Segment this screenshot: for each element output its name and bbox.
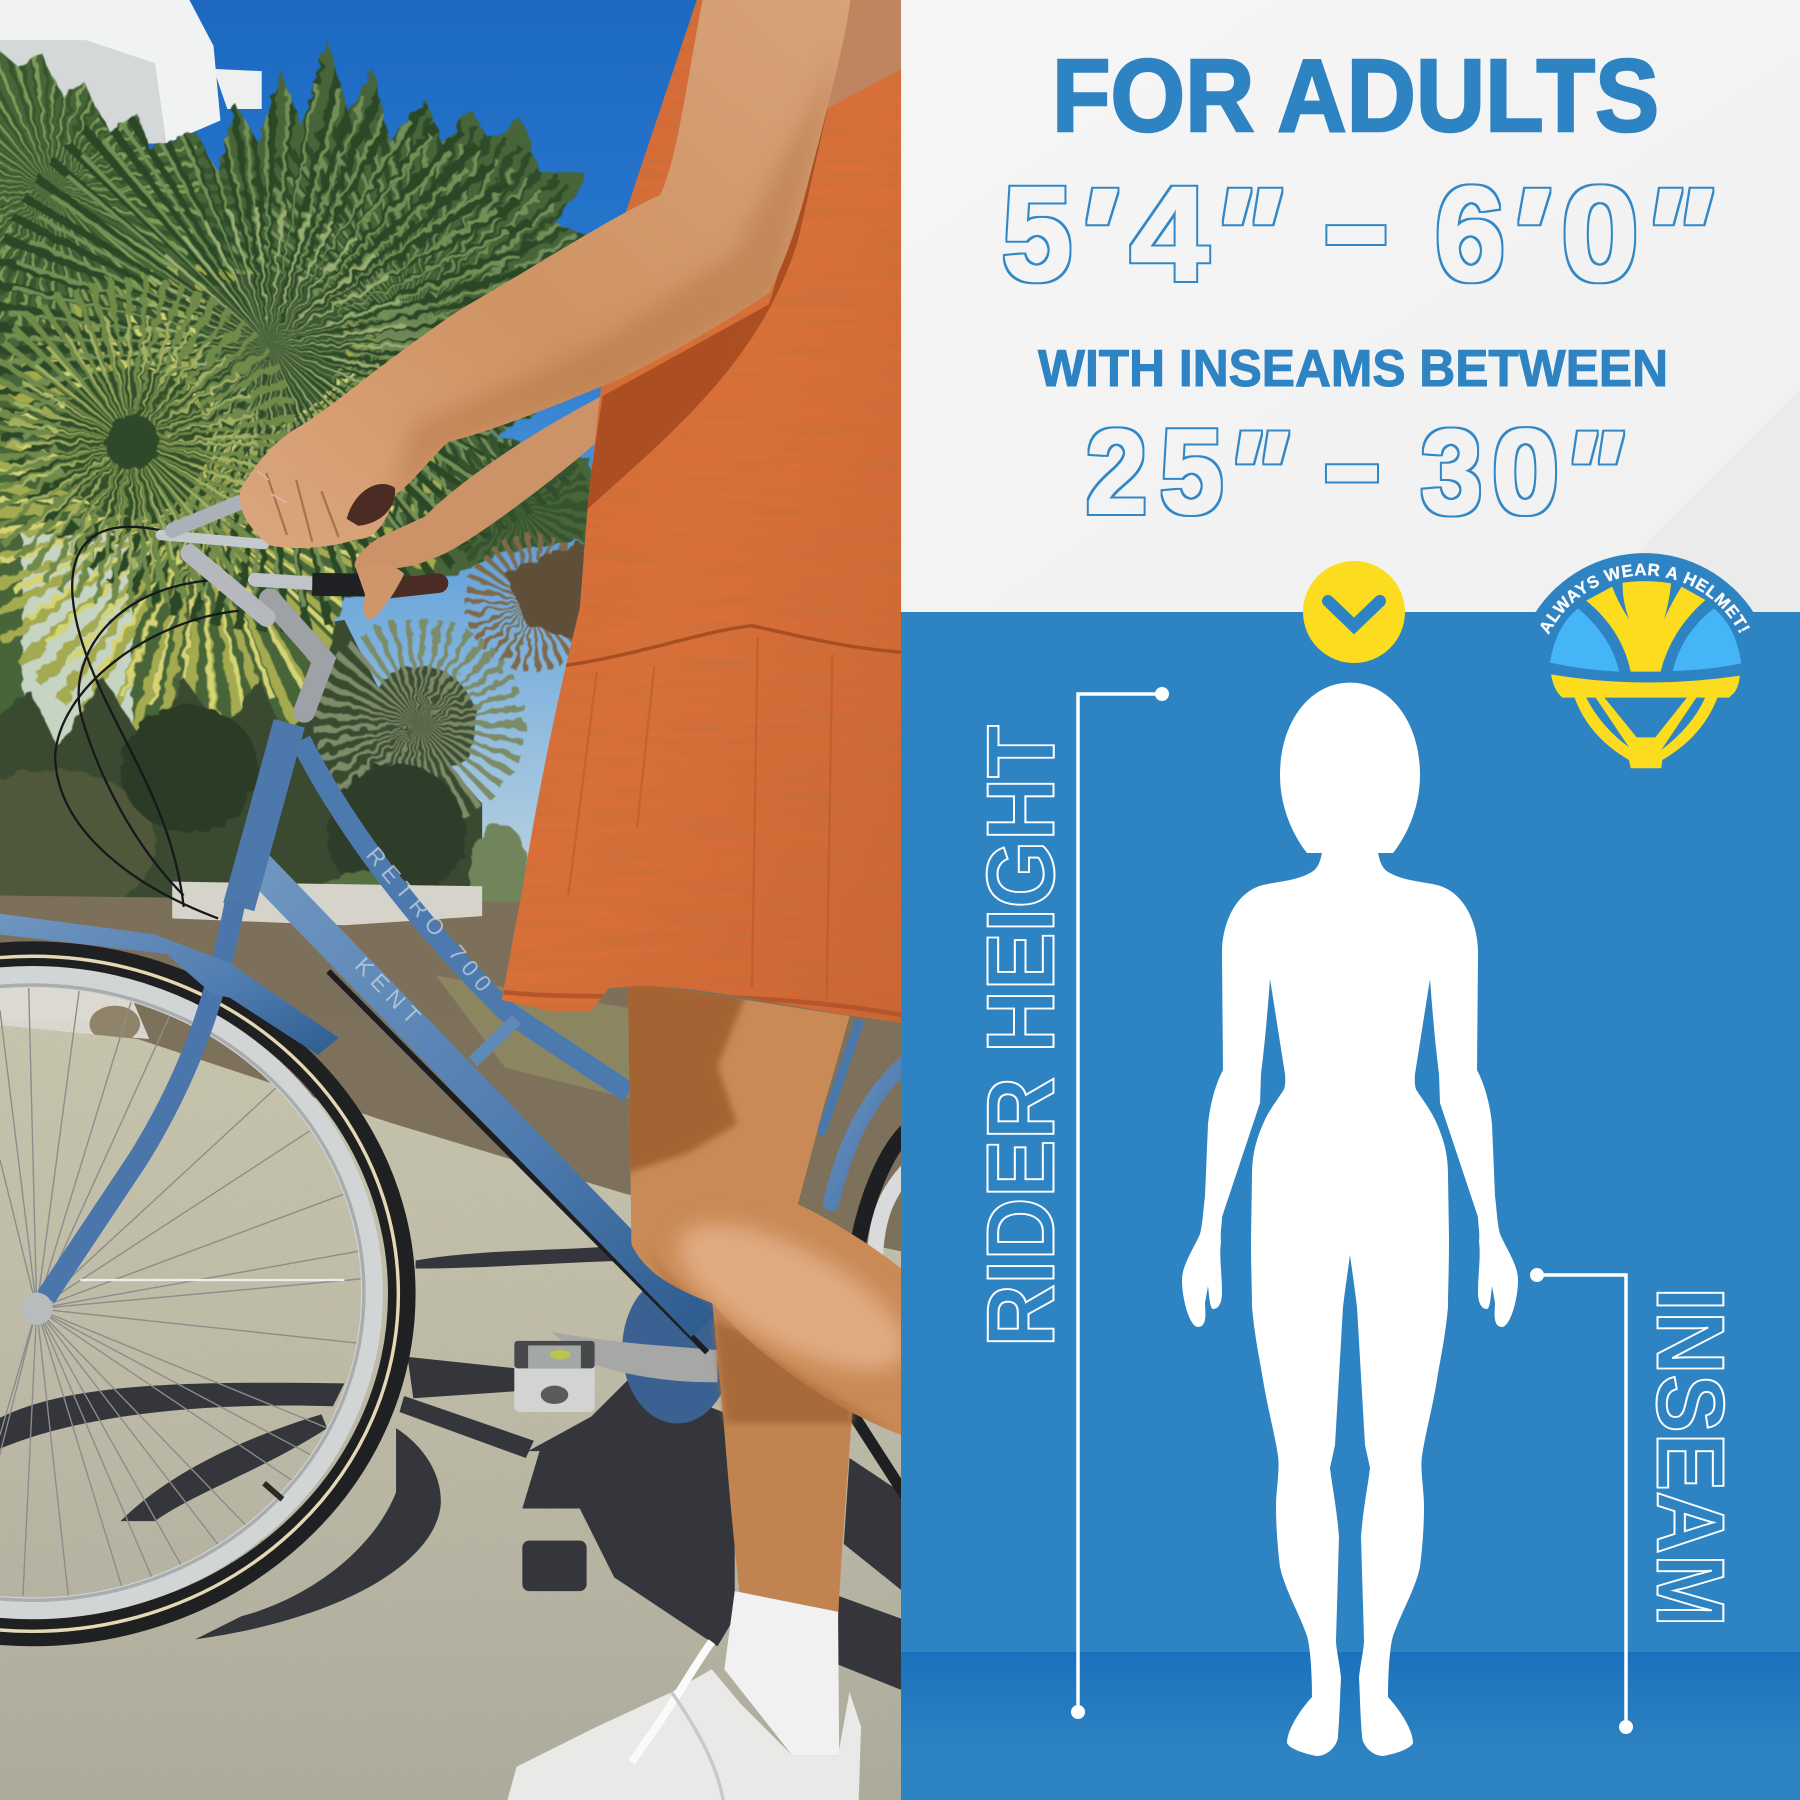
panel: light heading area <box>901 0 1800 613</box>
top left palm <box>0 98 143 281</box>
outlined rider height range: 0 <box>1561 160 1639 309</box>
inseam label: INSEAM <box>1636 1287 1744 1627</box>
subheading: with inseams between: WITH INSEAMS BETWEEN <box>1038 340 1668 398</box>
concrete grain <box>0 1022 901 1800</box>
rings <box>257 471 287 503</box>
outlined inseam range: 2 <box>1086 405 1147 539</box>
dress <box>0 0 901 1033</box>
rider height bracket <box>1071 687 1169 1719</box>
outlined inseam range: 5 <box>1160 405 1223 539</box>
white sneaker <box>507 1642 861 1800</box>
inseam bracket <box>1530 1268 1633 1734</box>
sock <box>724 1591 839 1755</box>
dark foliage backdrop <box>0 620 482 907</box>
icon: yellow chevron badge <box>1303 561 1405 663</box>
bicycle frame <box>21 723 707 1352</box>
lower grip <box>312 583 439 589</box>
far hand fingers <box>356 565 404 620</box>
house siding behind fronds <box>23 534 132 758</box>
panel: blue body silhouette area <box>901 612 1800 1800</box>
chest skin above neckline <box>827 0 901 109</box>
outlined rider height range: ' <box>1504 162 1549 311</box>
knee highlight <box>658 1195 926 1399</box>
palm mass <box>0 40 592 724</box>
upper grip <box>347 484 395 526</box>
shaded calf top <box>714 1320 855 1424</box>
rear wheel and fender <box>822 1024 907 1498</box>
mulch bed <box>0 882 901 1274</box>
standing lower leg <box>712 1297 855 1619</box>
centre palm <box>126 201 413 488</box>
front fender <box>0 914 339 1055</box>
arm underside shade <box>390 46 844 505</box>
outlined rider height range: ' <box>1072 162 1117 311</box>
outlined inseam range <box>1086 382 1623 543</box>
outlined rider height range: 6 <box>1435 160 1505 309</box>
dead brown frond <box>499 540 585 643</box>
photo: rider with bicycle <box>0 0 926 1800</box>
helmet drawing <box>1550 581 1741 768</box>
concrete path <box>0 1025 901 1800</box>
thigh shadow <box>620 976 746 1176</box>
finger lines <box>266 473 339 542</box>
brake cables <box>55 527 239 918</box>
knee underside shade <box>643 1246 901 1435</box>
shadow under arm <box>585 103 829 511</box>
outlined inseam range: – <box>1325 382 1379 543</box>
handlebars and stem <box>161 503 324 712</box>
left fan palm <box>49 359 215 525</box>
frame lettering: RETRO 700 <box>361 842 501 1002</box>
green below forearm <box>480 468 553 542</box>
right palm <box>298 224 517 442</box>
helmet slogan: ALWAYS WEAR A HELMET! <box>1540 563 1750 635</box>
outlined inseam range: 0 <box>1492 405 1559 539</box>
front wheel <box>0 955 402 1632</box>
frame model name: KENT <box>350 952 430 1034</box>
outlined rider height range <box>1002 133 1712 312</box>
heading: for adults: FOR ADULTS <box>1052 38 1659 153</box>
fabric wrinkles <box>0 0 901 1033</box>
outlined inseam range: " <box>1561 407 1623 541</box>
outlined inseam range: 3 <box>1421 405 1482 539</box>
palm trees <box>0 0 597 758</box>
lower dull palm <box>327 666 476 901</box>
outlined rider height range: 4 <box>1130 160 1209 309</box>
outlined inseam range: " <box>1224 407 1288 541</box>
yellow lower fronds <box>80 385 321 626</box>
spokes <box>0 982 362 1601</box>
floor band <box>901 1652 1800 1752</box>
outlined rider height range: " <box>1209 162 1281 311</box>
background building <box>0 0 262 144</box>
outlined rider height range: " <box>1640 162 1712 311</box>
outlined rider height range: 5 <box>1002 160 1072 309</box>
outlined rider height range: – <box>1325 133 1387 312</box>
near arm and hand <box>240 0 851 548</box>
chainring, crank and pedal <box>514 1274 732 1424</box>
tier seam <box>563 626 901 666</box>
low shrubs <box>0 706 529 954</box>
far forearm and hand <box>355 396 602 569</box>
sky <box>148 0 697 866</box>
body silhouette <box>1182 683 1518 1756</box>
cast shadows <box>0 1246 901 1690</box>
icon: always wear a helmet badge <box>1536 553 1754 768</box>
rider height label: RIDER HEIGHT <box>968 725 1074 1347</box>
raised thigh and knee <box>620 976 926 1435</box>
